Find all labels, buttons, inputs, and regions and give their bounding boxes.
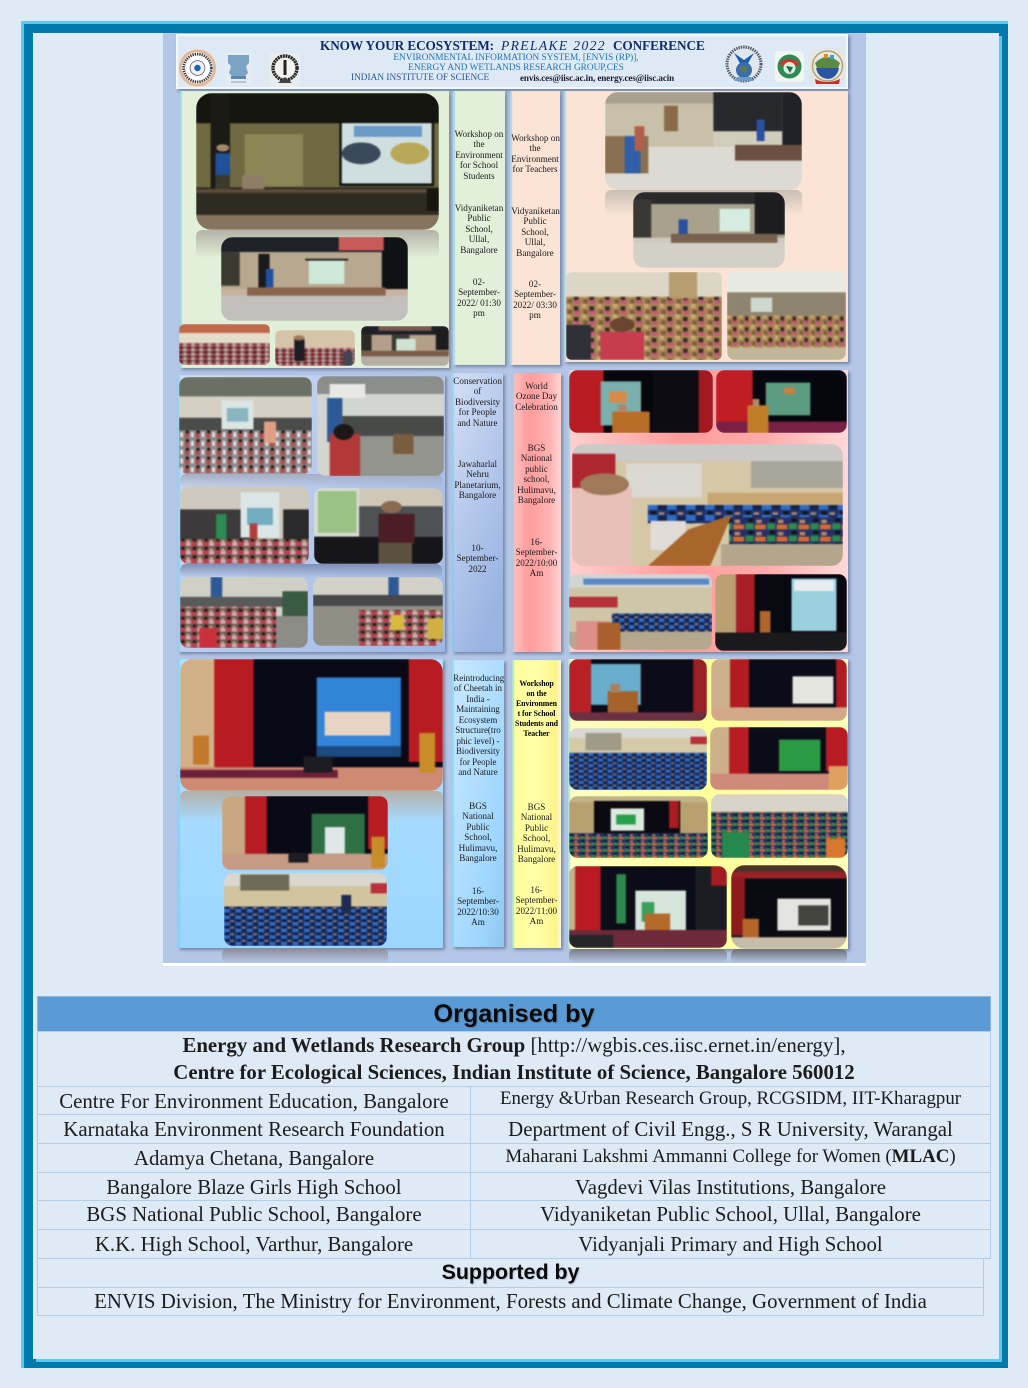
venue bbox=[513, 803, 560, 866]
workshop title: Workshop on bbox=[511, 133, 560, 144]
section 1: school students workshop photo panel bbox=[180, 91, 449, 368]
workshop title: Workshop on bbox=[455, 129, 503, 140]
text column: biodiversity session bbox=[452, 373, 503, 652]
conference title: KNOW YOUR ECOSYSTEM: CONFERENCE bbox=[320, 38, 705, 53]
photo: stage with cheetah lecture slide bbox=[180, 659, 443, 791]
organiser: MLAC bbox=[470, 1143, 991, 1173]
organiser: SR University bbox=[470, 1114, 991, 1144]
workshop title bbox=[511, 133, 560, 175]
photo: green slide with lamp and portrait bbox=[710, 727, 848, 790]
organiser: Vidyaniketan bbox=[470, 1200, 991, 1230]
date and time: 2022/10:30 bbox=[457, 907, 499, 918]
logo: ENVIS green bbox=[775, 51, 804, 82]
photo: hall stage with banners bbox=[221, 237, 408, 321]
workshop title bbox=[513, 679, 560, 740]
organiser: KK High School: K.K. High School, Varthur, Bangalore bbox=[95, 1232, 413, 1256]
venue: BGS bbox=[469, 801, 487, 812]
text column: ozone day bbox=[512, 373, 561, 652]
photo: stage from hall bbox=[361, 326, 449, 366]
organiser: BGS: BGS National Public School, Bangalore bbox=[86, 1202, 422, 1226]
organisation lines: ENVIRONMENTAL INFORMATION SYSTEM, [ENVIS (RP)], bbox=[393, 53, 639, 63]
venue: Vidyaniketan bbox=[455, 203, 503, 214]
venue: Bangalore bbox=[459, 853, 497, 864]
photo: speaker in maroon shirt bbox=[314, 488, 443, 564]
photo: UNEP slide in dark auditorium bbox=[715, 574, 847, 651]
venue: Bangalore bbox=[518, 495, 555, 506]
heading: supported by bbox=[37, 1258, 984, 1288]
section 2: biodiversity session photo panel bbox=[178, 375, 445, 652]
photo: podium and earth slide bbox=[569, 659, 707, 721]
session title: Structure(tro bbox=[455, 726, 501, 736]
venue: National bbox=[462, 811, 494, 822]
photo: teachers seated in chairs bbox=[727, 271, 846, 360]
photo: students seated, green and orange bbox=[711, 794, 848, 858]
session title: Biodiversity bbox=[456, 747, 500, 757]
heading: organised by: Organised by bbox=[434, 1000, 594, 1028]
date and time: 16- bbox=[530, 885, 543, 896]
venue: Hulimavu, bbox=[517, 844, 556, 855]
session title: Conservation bbox=[453, 376, 502, 387]
venue: Hulimavu, bbox=[517, 485, 556, 496]
photo: seated participants left view bbox=[180, 577, 308, 648]
venue bbox=[454, 203, 504, 256]
photo: speaker at podium with India flag slide bbox=[569, 370, 713, 433]
date and time: 16- bbox=[530, 537, 543, 548]
date and time bbox=[453, 887, 503, 929]
venue: Nehru bbox=[466, 469, 489, 480]
contact emails: envis.ces@iisc.ac.in, energy.ces@iisc.acin bbox=[520, 73, 674, 83]
workshop title bbox=[454, 129, 504, 182]
section 1: teachers workshop photo panel bbox=[564, 91, 848, 362]
conference title: PRELAKE 2022 bbox=[501, 38, 606, 53]
date and time: 16- bbox=[472, 886, 484, 897]
workshop title: Environment bbox=[455, 150, 503, 161]
header banner bbox=[176, 34, 848, 89]
section 2: ozone day photo panel bbox=[568, 370, 848, 652]
session title: of Cheetah in bbox=[454, 684, 502, 694]
venue: School, bbox=[521, 227, 549, 238]
venue: Bangalore bbox=[460, 245, 498, 256]
workshop title: Environmen bbox=[516, 699, 557, 708]
poster: event photo board bbox=[163, 33, 866, 966]
organiser: RCGSIDM bbox=[470, 1086, 991, 1115]
workshop title: Students and bbox=[515, 719, 558, 728]
logo: national emblem bbox=[228, 55, 249, 83]
institute name: INDIAN INSTITUTE OF SCIENCE bbox=[351, 73, 489, 83]
heading: organised by bbox=[37, 996, 991, 1032]
photo: audience facing projection screen bbox=[179, 377, 312, 474]
date and time bbox=[513, 886, 560, 928]
logo: globe and bird bbox=[726, 46, 762, 82]
date and time: pm bbox=[529, 310, 541, 321]
venue: Public bbox=[466, 822, 490, 833]
venue bbox=[454, 459, 501, 501]
lead organiser: Energy and Wetlands Research Group [http://wgbis.ces.iisc.ernet.in/energy], bbox=[182, 1033, 846, 1057]
venue: Planetarium, bbox=[454, 480, 501, 491]
text column: school students workshop bbox=[453, 91, 505, 365]
session title: Reintroducing bbox=[453, 674, 504, 684]
organiser: RCGSIDM: Energy &Urban Research Group, RCGSIDM, IIT-Kharagpur bbox=[500, 1088, 961, 1109]
photo: student speaking with microphone bbox=[275, 330, 355, 366]
photo: students in blue uniforms raising hands bbox=[569, 728, 707, 790]
section 3: cheetah session photo panel bbox=[178, 659, 443, 948]
session title: of bbox=[474, 386, 481, 397]
photo: podium and slide on red stage bbox=[716, 370, 847, 433]
venue bbox=[517, 443, 556, 506]
session title: India - bbox=[466, 695, 490, 705]
venue: Jawaharlal bbox=[458, 459, 497, 470]
photo: stage with projection bbox=[633, 192, 785, 268]
date and time: September- bbox=[516, 895, 557, 906]
venue: Vidyaniketan bbox=[511, 206, 560, 217]
photo: audience of teachers bbox=[566, 272, 722, 360]
venue: Public bbox=[467, 213, 491, 224]
photo: seated participants right view bbox=[313, 577, 443, 646]
photo: speaker and students wide view bbox=[569, 574, 712, 650]
organisers table bbox=[37, 996, 991, 1316]
organiser: CEE: Centre For Environment Education, Bangalore bbox=[59, 1089, 449, 1113]
session title: and Nature bbox=[458, 768, 498, 778]
organiser: BGS bbox=[37, 1200, 471, 1230]
workshop title: Workshop bbox=[519, 679, 554, 688]
date and time: pm bbox=[473, 308, 485, 319]
workshop title: for Teachers bbox=[512, 164, 557, 175]
venue: National bbox=[521, 453, 552, 464]
venue: Bangalore bbox=[459, 490, 496, 501]
date: 2022 bbox=[468, 564, 487, 575]
date and time: Am bbox=[471, 917, 485, 928]
date and time: 02- bbox=[529, 279, 541, 290]
organiser: Vagdevi: Vagdevi Vilas Institutions, Bangalore bbox=[575, 1175, 886, 1199]
photo: speaker addressing students in blue uniforms bbox=[572, 444, 843, 566]
photo: podium and green slide on stage bbox=[569, 866, 727, 948]
workshop title: Environment bbox=[511, 154, 559, 165]
organisation lines: ENERGY AND WETLANDS RESEARCH GROUP,CES bbox=[408, 63, 624, 73]
workshop title: the bbox=[529, 143, 541, 154]
event title: Celebration bbox=[515, 402, 558, 413]
supporter: ENVIS division: ENVIS Division, The Ministry for Environment, Forests and Climate Change, Government of India bbox=[94, 1289, 927, 1313]
date and time: September- bbox=[457, 896, 499, 907]
session title: for People bbox=[460, 758, 496, 768]
photo: black and white slide on stage bbox=[731, 865, 847, 949]
text column: cheetah session bbox=[452, 660, 504, 947]
date and time bbox=[516, 537, 558, 579]
session title: and Nature bbox=[457, 418, 498, 429]
organiser: SR University: Department of Civil Engg., S R University, Warangal bbox=[508, 1117, 953, 1141]
text column: school students and teacher workshop bbox=[512, 660, 561, 948]
venue: Hulimavu, bbox=[459, 843, 497, 854]
photo: presenter at screen, seated audience bbox=[180, 486, 309, 564]
text column: teachers workshop bbox=[510, 91, 560, 365]
heading: supported by: Supported by bbox=[442, 1260, 579, 1284]
workshop title: on the bbox=[526, 689, 547, 698]
venue: School, bbox=[464, 832, 492, 843]
organiser: Blaze bbox=[37, 1172, 471, 1201]
venue: School, bbox=[523, 833, 550, 844]
organiser: Vidyanjali: Vidyanjali Primary and High School bbox=[578, 1232, 883, 1256]
session title bbox=[453, 674, 503, 779]
organiser: Vidyaniketan: Vidyaniketan Public School, Ullal, Bangalore bbox=[540, 1202, 921, 1226]
organiser: Vidyanjali bbox=[470, 1229, 991, 1259]
date and time: September- bbox=[458, 287, 500, 298]
date and time: September- bbox=[514, 289, 556, 300]
date and time bbox=[457, 277, 501, 319]
date and time bbox=[513, 279, 557, 321]
venue: Public bbox=[523, 216, 547, 227]
logo: conference seal bbox=[179, 50, 216, 86]
venue: Bangalore bbox=[518, 854, 555, 865]
date and time: Am bbox=[530, 568, 543, 579]
section 3: students workshop photo panel bbox=[568, 659, 848, 949]
session title: phic level) - bbox=[456, 737, 500, 747]
event title: World bbox=[525, 381, 548, 392]
photo: teachers in empty hall bbox=[605, 92, 802, 190]
organiser: Adamya Chetana bbox=[37, 1143, 471, 1173]
date bbox=[457, 543, 498, 575]
session title: for People bbox=[459, 407, 496, 418]
date and time: Am bbox=[530, 916, 543, 927]
date and time: September- bbox=[516, 547, 557, 558]
organiser: Blaze: Bangalore Blaze Girls High School bbox=[106, 1175, 402, 1199]
session title: Maintaining bbox=[456, 705, 500, 715]
session title bbox=[453, 376, 502, 429]
date: September- bbox=[457, 553, 498, 564]
venue: public bbox=[525, 464, 548, 475]
lead organiser: Centre for Ecological Sciences, Indian Institute of Science, Bangalore 560012 bbox=[173, 1060, 855, 1084]
session title: Biodiversity bbox=[455, 397, 500, 408]
photo: students in blue seated in auditorium bbox=[224, 873, 387, 946]
workshop title: t for School bbox=[518, 709, 555, 718]
photo: stage with slide, right view bbox=[711, 659, 847, 721]
photo: students seated in hall bbox=[179, 324, 270, 365]
event title bbox=[515, 381, 558, 413]
photo: speaker and screen on stage bbox=[196, 93, 439, 230]
venue: Bangalore bbox=[516, 248, 554, 259]
workshop title: the bbox=[473, 139, 485, 150]
venue bbox=[453, 802, 503, 865]
venue: School, bbox=[465, 224, 493, 235]
venue: National bbox=[521, 812, 552, 823]
date and time: 2022/ 01:30 bbox=[457, 298, 501, 309]
date and time: 2022/10:00 bbox=[516, 558, 557, 569]
venue: BGS bbox=[528, 443, 545, 454]
organiser: MLAC: Maharani Lakshmi Ammanni College for Women (MLAC) bbox=[505, 1146, 956, 1167]
logo: lake conference seal bbox=[810, 49, 845, 84]
organisation lines bbox=[393, 53, 639, 73]
venue: school, bbox=[523, 474, 550, 485]
venue: Ullal, bbox=[469, 234, 489, 245]
date and time: 2022/ 03:30 bbox=[513, 300, 557, 311]
organiser: KK High School bbox=[37, 1229, 471, 1259]
workshop title: Teacher bbox=[523, 729, 550, 738]
photo: auditorium audience and green screen bbox=[569, 796, 708, 858]
organiser: KERF: Karnataka Environment Research Foundation bbox=[63, 1117, 445, 1141]
date and time: 2022/11:00 bbox=[516, 906, 557, 917]
date and time: 02- bbox=[473, 277, 485, 288]
organiser: Vagdevi bbox=[470, 1172, 991, 1201]
workshop title: for School bbox=[460, 160, 498, 171]
photo: hall with blue column bbox=[317, 376, 444, 476]
organiser: Adamya Chetana: Adamya Chetana, Bangalore bbox=[134, 1146, 374, 1170]
event title: Ozone Day bbox=[516, 391, 557, 402]
workshop title: Students bbox=[463, 171, 495, 182]
date: 10- bbox=[471, 543, 484, 554]
lead organiser bbox=[37, 1031, 991, 1087]
logo: IISc crest bbox=[270, 53, 300, 87]
venue bbox=[511, 206, 560, 259]
venue: Ullal, bbox=[525, 237, 545, 248]
venue: BGS bbox=[528, 802, 545, 813]
photo: stage with waterfall slide bbox=[222, 796, 388, 870]
venue: Public bbox=[525, 823, 548, 834]
session title: Ecosystem bbox=[459, 716, 497, 726]
